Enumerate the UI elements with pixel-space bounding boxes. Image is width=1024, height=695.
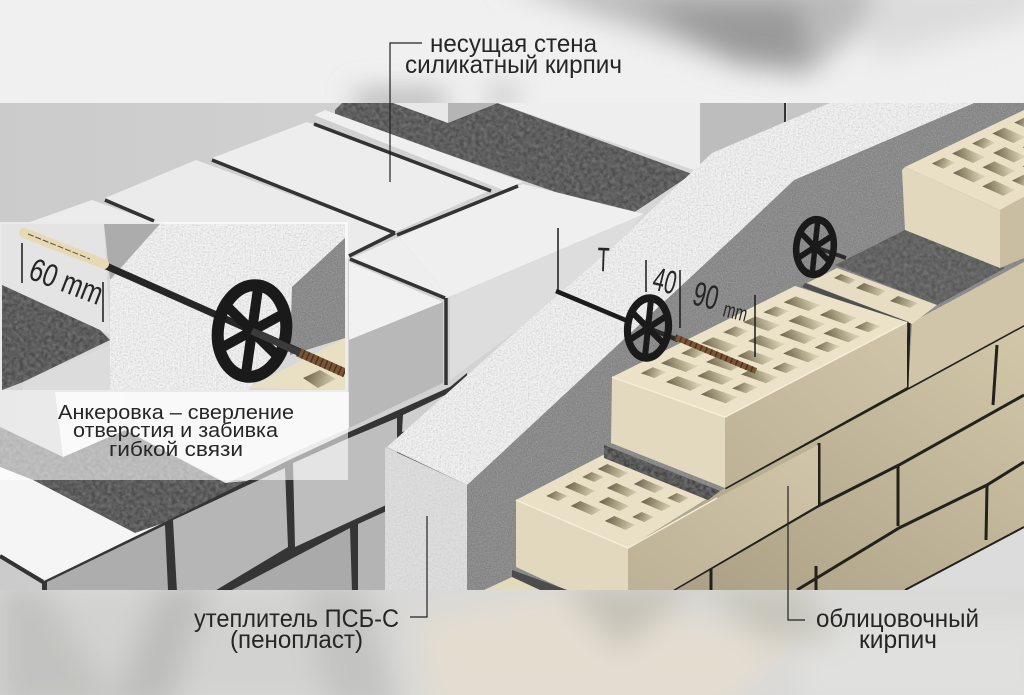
brick mortar joints: [105, 124, 518, 385]
dark mortar bed: [335, 103, 692, 217]
dimension 40: 40: [649, 260, 681, 301]
lower left grey brick faces: [42, 373, 470, 592]
upper mortar slab: [835, 230, 1005, 305]
floor: [905, 527, 1024, 590]
dimension 90 mm: [689, 275, 750, 327]
small mortar and brick at the foot: [484, 570, 570, 591]
main facing brick: [611, 286, 907, 488]
dimension T: T: [597, 241, 610, 279]
wall block above mortar: [393, 103, 498, 123]
scene background: [0, 103, 1024, 590]
bottom blurred band: [0, 585, 1024, 695]
insulation foam: front face: [385, 447, 467, 590]
callout: insulation: [194, 516, 427, 654]
upper anchor washer: [794, 218, 846, 276]
mortar strip next to main brick: [802, 283, 909, 327]
facing brick: lower half brick: [516, 445, 818, 591]
callout: insulation: (пенопласт): [230, 626, 363, 654]
inset photo: [2, 224, 345, 390]
inset caption: гибкой связи: [109, 439, 243, 461]
mortar strip between bricks: [604, 445, 720, 500]
main anchor washer and rod: [625, 296, 756, 371]
top blurred band: [0, 0, 1024, 103]
dimension 90 mm: mm: [721, 297, 750, 327]
callout: load-bearing wall: силикатный кирпич: [405, 51, 622, 79]
load-bearing wall upper blocks: [498, 103, 830, 172]
callout: facing brick: кирпич: [859, 626, 937, 654]
lower left white brick top: [0, 467, 165, 580]
inset dimension 60 mm: 60 mm: [24, 251, 108, 312]
callout: facing brick: [788, 486, 979, 654]
anchor rod near foam: [556, 291, 630, 322]
callout: facing brick: облицовочный: [816, 605, 979, 633]
dark mortar running under panel: [0, 427, 257, 533]
white block tops under panel: [55, 392, 349, 483]
inset caption: [58, 402, 294, 461]
dimension 90 mm: 90: [689, 275, 723, 318]
facing brick wall: lower courses: [628, 325, 1024, 590]
callout: insulation: утеплитель ПСБ-С: [194, 605, 399, 633]
top right facing brick: [902, 110, 1024, 268]
dimension marks: [558, 228, 755, 357]
air gap textured grey: [467, 103, 1024, 590]
inset caption: Анкеровка – сверление: [58, 402, 294, 424]
callout: load-bearing wall: [390, 30, 622, 182]
insulation foam: top face: [387, 103, 974, 485]
inset caption: отверстия и забивка: [73, 420, 279, 442]
silicate brick courses: [30, 110, 644, 428]
callout: load-bearing wall: несущая стена: [430, 30, 597, 58]
facing brick behind main brick: [807, 262, 1024, 388]
translucent inset panel: [0, 222, 348, 480]
